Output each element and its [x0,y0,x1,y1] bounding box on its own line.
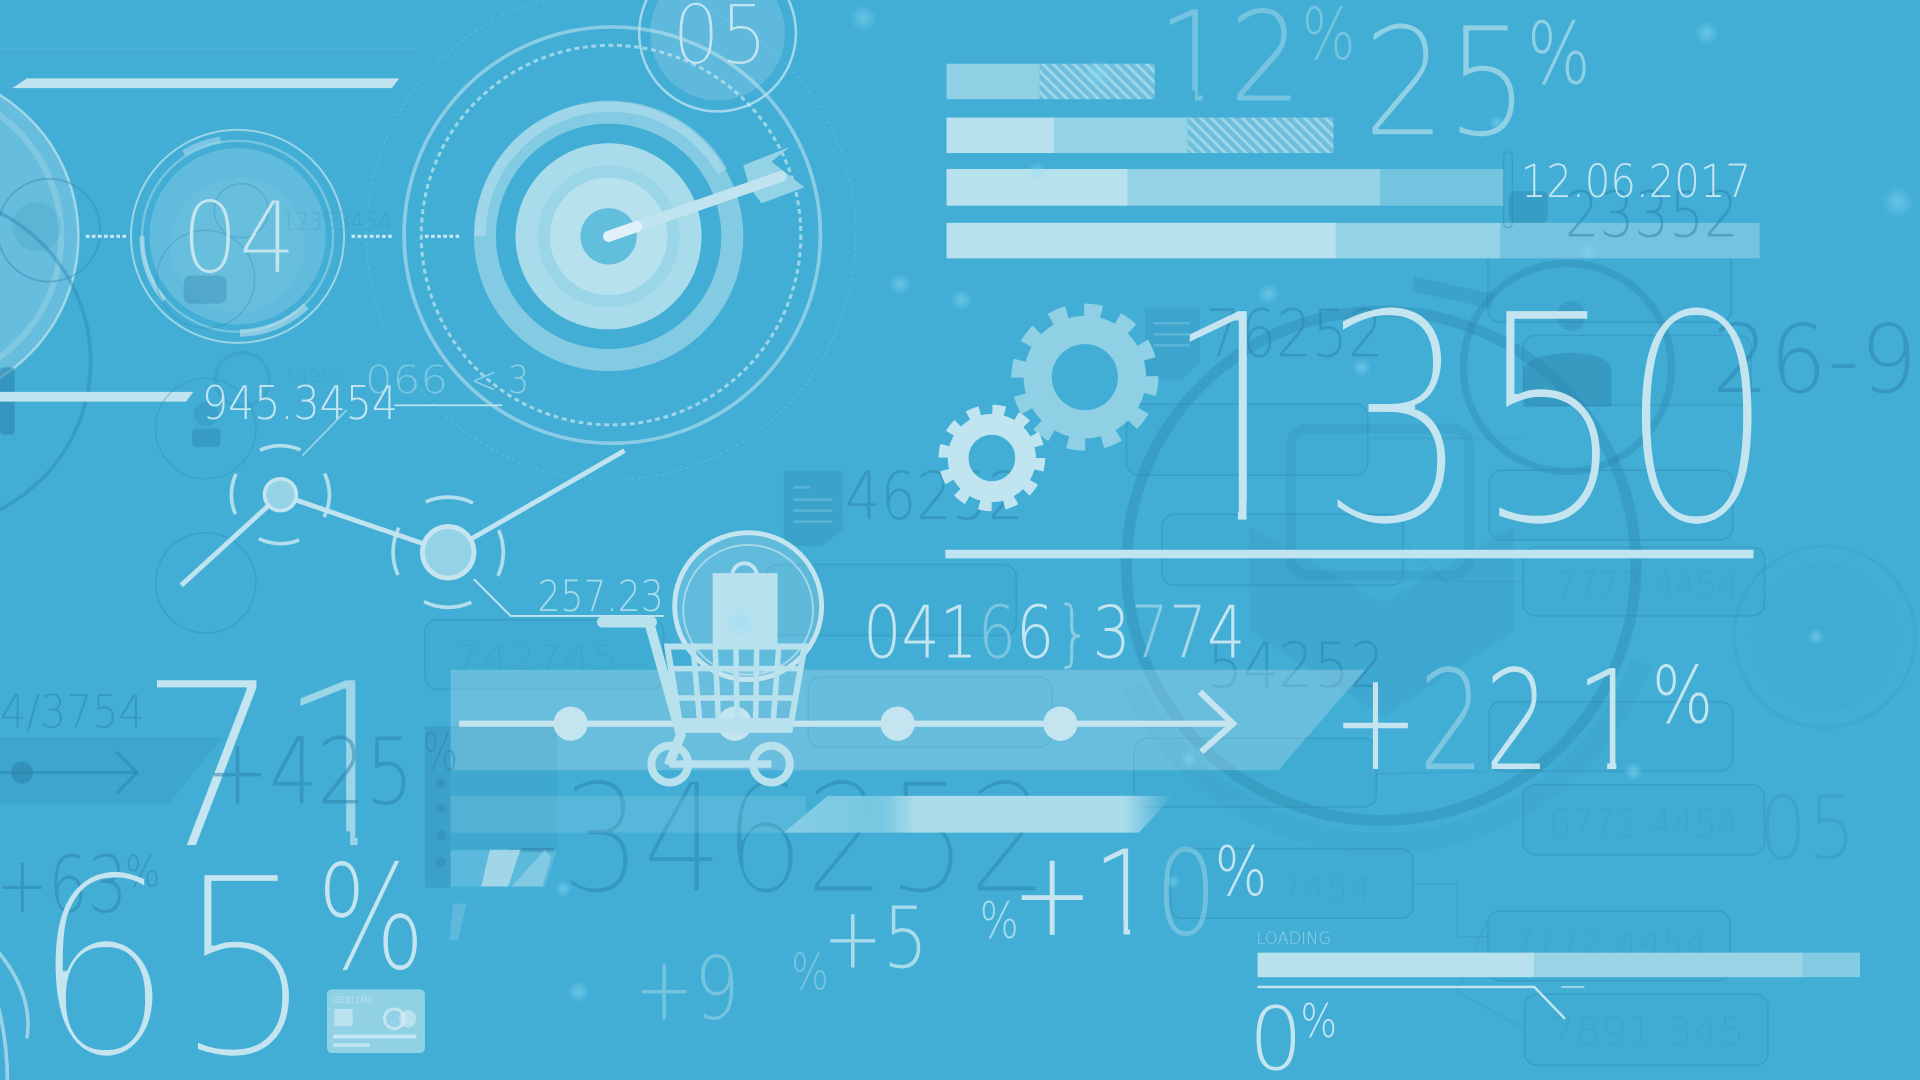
loading progress bar: LOADING [1256,929,1331,949]
large dark ring with shield emblem [1127,311,1641,843]
dark person ring under 945.3454 [156,353,345,479]
value 066 < 3 [365,358,529,405]
faint number 05: 05 [1758,777,1856,879]
box [1523,547,1764,616]
bar 2 [947,118,1333,153]
value +10%: % [1215,832,1267,911]
value 066 < 3: 066 [365,358,448,402]
value +10% [1022,844,1264,936]
dark number 46252 with document icon: 46252 [845,458,1024,535]
faint dark ring right [1734,546,1915,727]
dark value -346252: -346252 [514,750,1049,927]
bar 3 [947,169,1504,206]
value +221%: % [1652,650,1713,741]
circle badge 05 [639,0,796,111]
large gear [1019,311,1151,443]
big value 71 [156,680,358,846]
dark person ring under 945.3454: 14954 [284,367,345,387]
box [1523,785,1764,855]
dark ring with person icon [1413,263,1671,471]
box: 742745 [453,639,618,679]
value 257.23: 257.23 [538,572,664,622]
third translucent band [449,850,557,940]
big value 1350 [1190,307,1752,524]
credit card icon [327,989,425,1053]
arrow in target [609,147,804,236]
value +9%: +9 [634,938,740,1040]
box: 7891.345 [1549,1009,1745,1054]
dark band with arrow, left [0,737,223,803]
big value 65%: % [316,835,426,1004]
cart [602,622,804,782]
bar 1 [947,64,1155,99]
stacked bars [947,64,1760,258]
box [1134,738,1376,807]
box [425,620,664,689]
box [1162,514,1403,585]
box [765,564,1016,636]
box [1489,470,1733,540]
value +9%: % [791,942,829,1001]
value 0%: % [1300,994,1337,1048]
dark value +63%: % [125,848,160,898]
bag [713,563,778,647]
box [1524,994,1768,1065]
date 12.06.2017: 12.06.2017 [1521,155,1751,208]
dark number 46252 with document icon [784,458,1024,546]
dark number 4/3754: 4/3754 [0,685,144,738]
dark number 76252 with document icon [1145,295,1384,380]
faint rule [0,48,416,50]
box [1488,251,1731,322]
credit card icon: CREDIT CARD [333,996,372,1006]
value 066 < 3: < 3 [470,358,529,402]
big value 1350: 135 [1161,251,1629,591]
big value 71: 1 [274,634,420,901]
box [1127,404,1368,475]
shopping cart with bag bubble [602,531,823,782]
box [1489,702,1733,771]
dotted connectors [86,235,459,238]
small gear [943,410,1040,506]
dark strip at band edge [425,726,557,888]
value +221%: 1 [1575,641,1647,802]
box: 7772.4454 [1512,926,1708,960]
left cropped circle group [0,70,100,528]
box [808,677,1052,747]
data boxes layer [425,251,1768,1065]
dark value +425%: +425 [206,718,414,825]
circle badge 04: 12353454 [282,207,392,236]
target with rings [366,0,856,480]
bar 4 [947,223,1760,258]
value 04166}3774: 04166}3774 [863,592,1245,676]
value +5: +5 [823,889,928,987]
dark value +63%: +63 [0,840,127,931]
value 12% [1170,6,1352,100]
left accent bar [0,392,193,402]
box: 6772.4454 [1549,801,1739,846]
box [1523,336,1751,405]
value 945.3454: 945.3454 [202,376,398,430]
timeline arrow with nodes [459,692,1233,752]
circle badge 04 [131,130,392,343]
value 25%: % [1527,4,1591,104]
value +10%: +10 [1011,825,1217,962]
bubble [673,531,823,681]
connector lines between boxes [1371,438,1524,1029]
dark number 23352 with clip icon: 23352 [1565,178,1739,252]
box: 7772.4454 [1555,564,1739,607]
loading progress bar [1256,929,1860,1019]
second translucent band [451,796,1173,833]
dark number 23352 with clip icon [1504,152,1739,252]
big value 71: 7 [137,634,283,901]
value +9% [634,938,829,1040]
big value 1350: 0 [1618,251,1777,591]
box [1488,911,1730,981]
bottom-left arc [0,945,28,1080]
glowing particles [555,5,1914,1003]
value +221% [1343,664,1708,769]
dark number 54252: 54252 [1207,629,1385,702]
dark value +425%: % [422,723,458,783]
gear icons [943,311,1151,506]
box [1171,849,1413,918]
top-left accent bar [12,78,399,88]
translucent band behind timeline [451,670,1365,770]
circle badge 04: 04 [181,181,296,296]
dark number 76252 with document icon: 76252 [1205,295,1384,372]
value 0% [1249,988,1337,1080]
box: 7454 [1280,870,1371,908]
value +221%: +22 [1332,641,1550,802]
line chart with nodes [156,410,664,633]
rule under 1350 [945,550,1753,558]
percent sign: % [980,891,1019,950]
